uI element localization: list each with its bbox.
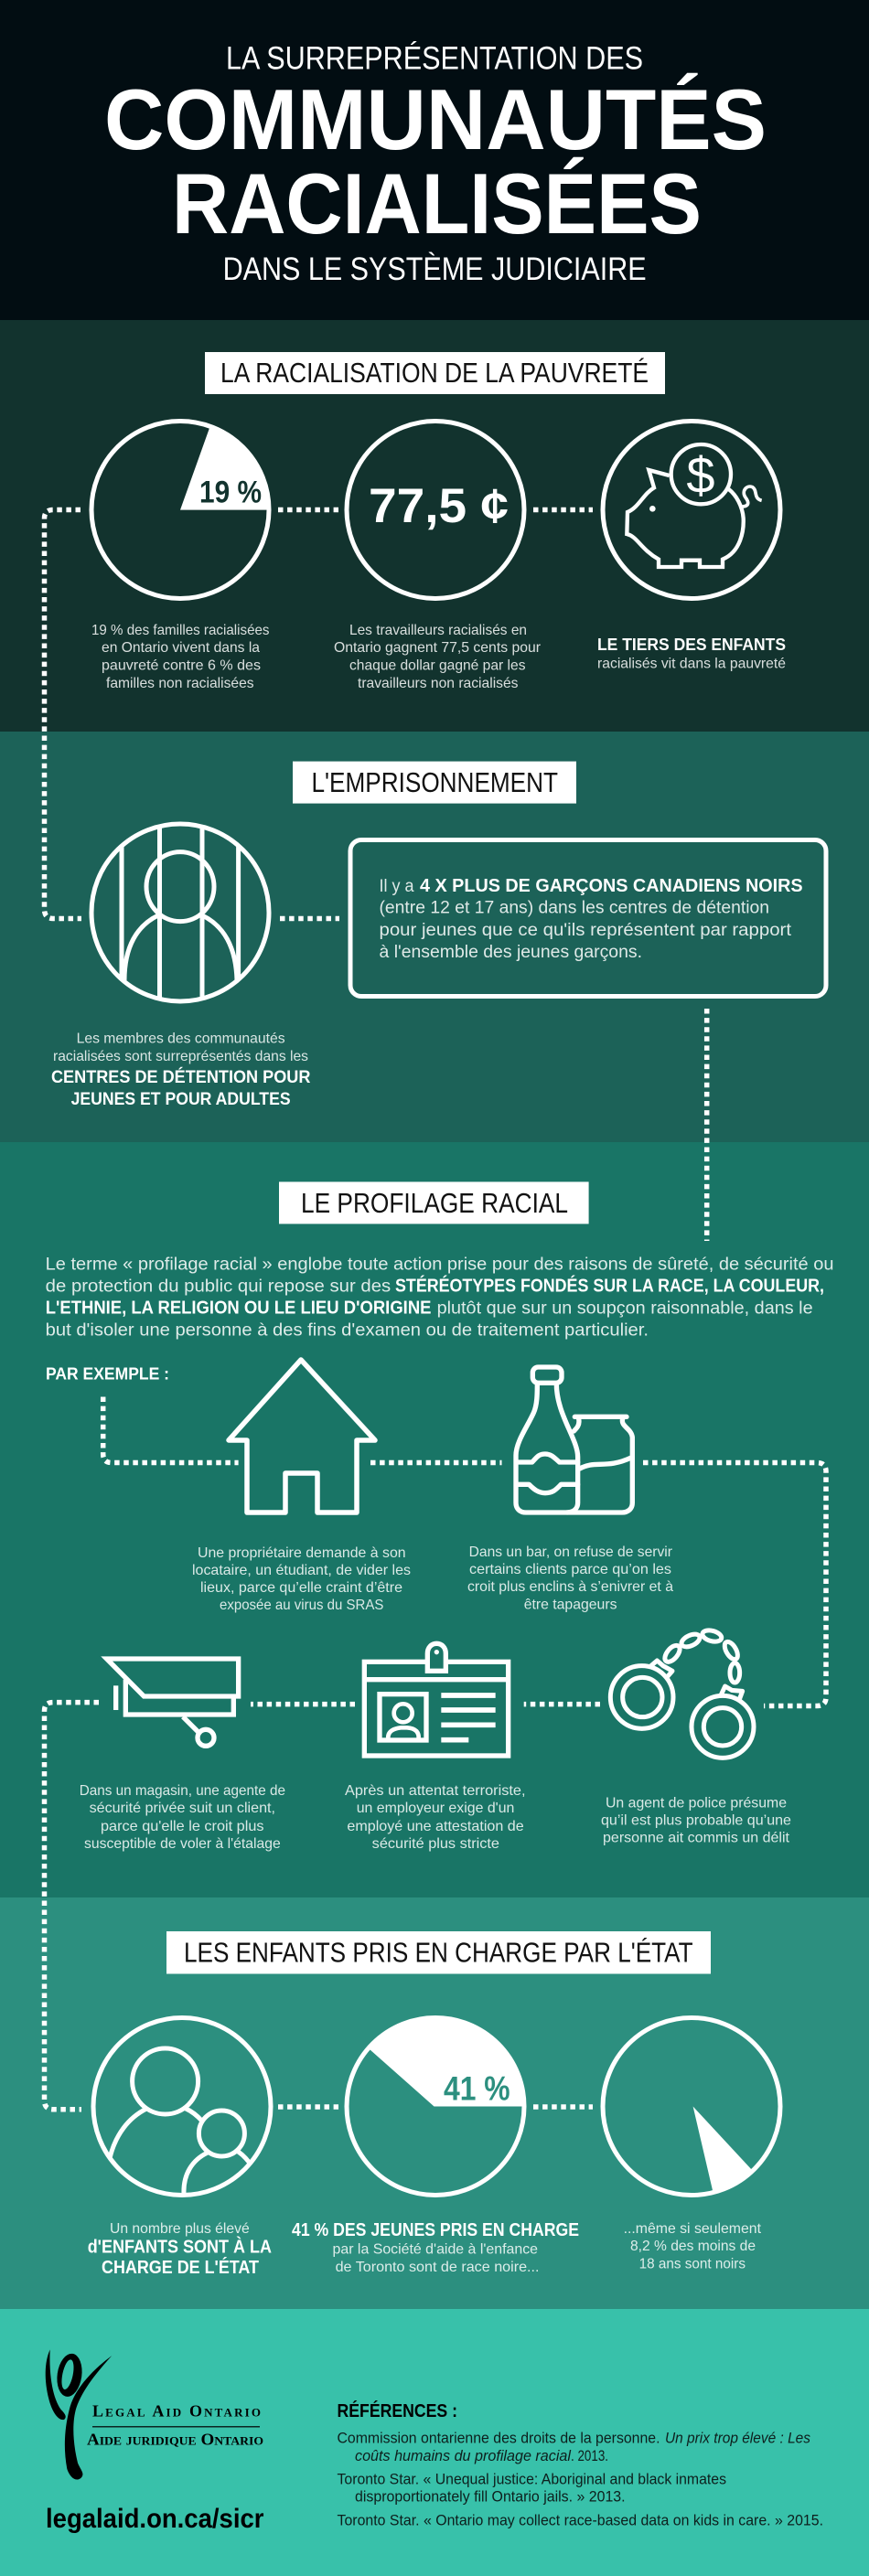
- text: magasin caption: [80, 1783, 285, 1852]
- text: références: RÉFÉRENCES :: [337, 2400, 457, 2421]
- text: house caption: exposée au virus du SRAS: [220, 1598, 383, 1613]
- text: 19 % caption: 19 % des familles racialisées: [91, 623, 269, 638]
- arrow: dotted connector, bottle to handcuffs: [643, 1463, 826, 1706]
- text: 41 % caption: par la Société d'aide à l'enfance: [333, 2241, 538, 2257]
- text: références: Toronto Star. « Ontario may collect race-based data on kids in care. » 2015.: [337, 2513, 823, 2529]
- text: url: legalaid.on.ca/sicr: [46, 2504, 264, 2534]
- text: définition du profilage racial: L'ETHNIE, LA RELIGION OU LE LIEU D'ORIGINE: [46, 1299, 431, 1319]
- heading: le profilage racial: LE PROFILAGE RACIAL: [301, 1187, 568, 1219]
- text: références: [337, 2400, 823, 2529]
- callout: 4 x plus de garçons: [350, 839, 826, 997]
- text: police caption: qu’il est plus probable qu’une: [601, 1813, 791, 1829]
- logo: legal aid ontario: [46, 2349, 263, 2480]
- icon: piggy bank: [603, 421, 780, 598]
- text: attentat caption: sécurité plus stricte: [372, 1836, 499, 1852]
- title: LA SURREPRÉSENTATION DES: [226, 40, 643, 77]
- text: références: . 2013.: [571, 2448, 608, 2464]
- arrow: dotted connector, house to bottle: [370, 1460, 501, 1465]
- text: détention caption: racialisées sont surreprésentés dans les: [53, 1049, 308, 1064]
- heading: l'emprisonnement: L'EMPRISONNEMENT: [311, 766, 558, 798]
- text: définition du profilage racial: de protection du public qui repose sur des: [46, 1277, 391, 1297]
- text: bar caption: Dans un bar, on refuse de servir: [469, 1545, 673, 1560]
- arrow: dotted connector, prisoner to callout: [280, 916, 339, 921]
- text: magasin caption: Dans un magasin, une agente de: [80, 1783, 285, 1799]
- text: enfants caption: [88, 2221, 272, 2278]
- logo: legal aid ontario: Aide juridique Ontario: [87, 2430, 263, 2448]
- icon: id badge: [364, 1643, 509, 1756]
- logo: legal aid ontario: Legal Aid Ontario: [92, 2402, 261, 2421]
- text: 19 % caption: familles non racialisées: [106, 676, 254, 691]
- arrow: dotted connector, handcuffs to id badge: [524, 1702, 600, 1706]
- icon: person behind bars: [91, 824, 269, 1001]
- callout: 4 x plus de garçons: Il y a: [379, 877, 414, 896]
- text: 8,2 % caption: [624, 2221, 762, 2271]
- callout: 4 x plus de garçons: à l'ensemble des jeunes garçons.: [379, 943, 642, 962]
- heading: l'emprisonnement: [293, 762, 576, 804]
- text: 41 % caption: [292, 2220, 579, 2275]
- heading: le profilage racial: [279, 1181, 589, 1224]
- text: tiers des enfants caption: LE TIERS DES ENFANTS: [597, 635, 786, 654]
- text: références: Commission ontarienne des droits de la personne.: [337, 2431, 660, 2447]
- text: 77,5 cents caption: chaque dollar gagné par les: [349, 658, 525, 673]
- text: 19 % caption: en Ontario vivent dans la: [102, 640, 260, 656]
- title: COMMUNAUTÉS: [104, 71, 767, 167]
- text: police caption: personne ait commis un délit: [603, 1831, 790, 1846]
- panel: footer: [0, 2309, 869, 2576]
- text: enfants caption: d'ENFANTS SONT À LA: [88, 2237, 272, 2257]
- arrow: dotted connector, callout to profilage: [704, 1009, 709, 1241]
- text: définition du profilage racial: but d'isoler une personne à des fins d'examen ou de traitement particulier.: [46, 1321, 649, 1341]
- text: tiers des enfants caption: racialisés vit dans la pauvreté: [597, 657, 786, 672]
- text: 77,5 cents caption: Ontario gagnent 77,5 cents pour: [334, 640, 542, 656]
- text: magasin caption: susceptible de voler à l'étalage: [84, 1836, 281, 1852]
- text: enfants caption: Un nombre plus élevé: [110, 2221, 250, 2237]
- pie chart: 19 %: [91, 421, 270, 598]
- text: détention caption: CENTRES DE DÉTENTION POUR: [51, 1066, 310, 1087]
- stat: 77,5 cents: [347, 421, 524, 598]
- text: définition du profilage racial: [46, 1255, 833, 1341]
- text: attentat caption: employé une attestation de: [347, 1819, 524, 1834]
- text: enfants caption: CHARGE DE L'ÉTAT: [102, 2257, 259, 2278]
- panel: les enfants pris en charge: [0, 1897, 869, 2309]
- text: police caption: Un agent de police présume: [606, 1796, 787, 1811]
- arrow: dotted connector, id badge to camera: [251, 1702, 355, 1706]
- text: 8,2 % caption: 8,2 % des moins de: [630, 2239, 756, 2254]
- text: détention caption: [51, 1031, 310, 1109]
- arrow: dotted connector, camera to enfants: [44, 1703, 99, 2110]
- text: références: coûts humains du profilage racial: [355, 2448, 572, 2464]
- text: attentat caption: Après un attentat terroriste,: [345, 1783, 525, 1799]
- pie chart: 41 %: [347, 2016, 525, 2195]
- callout: 4 x plus de garçons: (entre 12 et 17 ans) dans les centres de détention: [379, 899, 769, 918]
- text: 8,2 % caption: ...même si seulement: [624, 2221, 762, 2237]
- text: bar caption: croit plus enclins à s’enivrer et à: [467, 1579, 673, 1595]
- icon: house: [229, 1360, 375, 1512]
- icon: security camera: [107, 1659, 239, 1746]
- text: 77,5 cents caption: Les travailleurs racialisés en: [349, 623, 527, 638]
- callout: 4 x plus de garçons: pour jeunes que ce qu'ils représentent par rapport: [379, 921, 792, 940]
- text: bar caption: [467, 1545, 673, 1613]
- text: house caption: [192, 1545, 411, 1613]
- title: RACIALISÉES: [172, 155, 702, 251]
- panel: header: [0, 0, 869, 320]
- icon: piggy bank: $: [686, 446, 715, 504]
- text: 41 % caption: 41 % DES JEUNES PRIS EN CHARGE: [292, 2220, 579, 2240]
- text: références: Toronto Star. « Unequal justice: Aboriginal and black inmates: [337, 2471, 726, 2487]
- title: [104, 40, 767, 287]
- text: house caption: lieux, parce qu’elle craint d’être: [200, 1580, 402, 1596]
- arrow: dotted connector, pauvreté to emprisonnement: [44, 510, 81, 918]
- pie chart: 41 %: 41 %: [444, 2070, 510, 2108]
- text: bar caption: certains clients parce qu’on les: [469, 1562, 671, 1577]
- text: attentat caption: [345, 1783, 525, 1852]
- panel: l'emprisonnement: [0, 732, 869, 1142]
- text: magasin caption: parce qu'elle le croit plus: [101, 1819, 263, 1834]
- arrow: dotted connectors, first row circles: [278, 508, 593, 512]
- callout: 4 x plus de garçons: 4 X PLUS DE GARÇONS CANADIENS NOIRS: [420, 875, 803, 896]
- panel: la racialisation de la pauvreté: [0, 320, 869, 732]
- text: détention caption: Les membres des communautés: [77, 1031, 285, 1047]
- icon: bottle and jar: [516, 1367, 632, 1512]
- pie chart: 19 %: 19 %: [199, 476, 262, 510]
- text: house caption: Une propriétaire demande à son: [198, 1545, 406, 1561]
- text: 19 % caption: pauvreté contre 6 % des: [102, 658, 261, 673]
- text: attentat caption: un employeur exige d'un: [357, 1801, 514, 1816]
- text: définition du profilage racial: Le terme « profilage racial » englobe toute action prise pour des raisons de sûreté, de sécurité ou: [46, 1255, 833, 1274]
- heading: les enfants pris en charge par l'état: [166, 1931, 711, 1973]
- text: police caption: [601, 1796, 791, 1846]
- text: références: Un prix trop élevé : Les: [665, 2431, 810, 2447]
- heading: la racialisation de la pauvreté: LA RACIALISATION DE LA PAUVRETÉ: [220, 357, 649, 389]
- text: 8,2 % caption: 18 ans sont noirs: [639, 2256, 746, 2271]
- text: références: disproportionately fill Ontario jails. » 2013.: [355, 2489, 626, 2506]
- text: 77,5 cents caption: travailleurs non racialisés: [358, 676, 518, 691]
- text: house caption: locataire, un étudiant, de vider les: [192, 1563, 411, 1578]
- title: DANS LE SYSTÈME JUDICIAIRE: [223, 251, 647, 287]
- text: par exemple: PAR EXEMPLE :: [46, 1364, 169, 1383]
- text: 41 % caption: de Toronto sont de race noire...: [336, 2260, 540, 2275]
- text: 77,5 cents caption: [334, 623, 542, 691]
- panel: le profilage racial: [0, 1142, 869, 1897]
- text: définition du profilage racial: plutôt que sur un soupçon raisonnable, dans le: [437, 1299, 813, 1319]
- heading: la racialisation de la pauvreté: [205, 352, 665, 394]
- icon: handcuffs: [610, 1629, 754, 1758]
- text: définition du profilage racial: STÉRÉOTYPES FONDÉS SUR LA RACE, LA COULEUR,: [395, 1275, 824, 1297]
- text: tiers des enfants caption: [597, 635, 786, 672]
- icon: adult and child: [93, 2017, 271, 2195]
- stat: 77,5 cents: 77,5 ¢: [369, 479, 509, 533]
- pie chart: 8,2 %: [603, 2017, 780, 2195]
- text: 19 % caption: [91, 623, 269, 691]
- arrow: dotted connectors, last row circles: [278, 2104, 593, 2110]
- text: magasin caption: sécurité privée suit un client,: [90, 1801, 275, 1816]
- heading: les enfants pris en charge par l'état: LES ENFANTS PRIS EN CHARGE PAR L'ÉTAT: [184, 1937, 693, 1969]
- text: bar caption: être tapageurs: [524, 1597, 617, 1613]
- arrow: dotted connector, par exemple to house: [103, 1397, 239, 1463]
- text: détention caption: JEUNES ET POUR ADULTES: [71, 1089, 291, 1109]
